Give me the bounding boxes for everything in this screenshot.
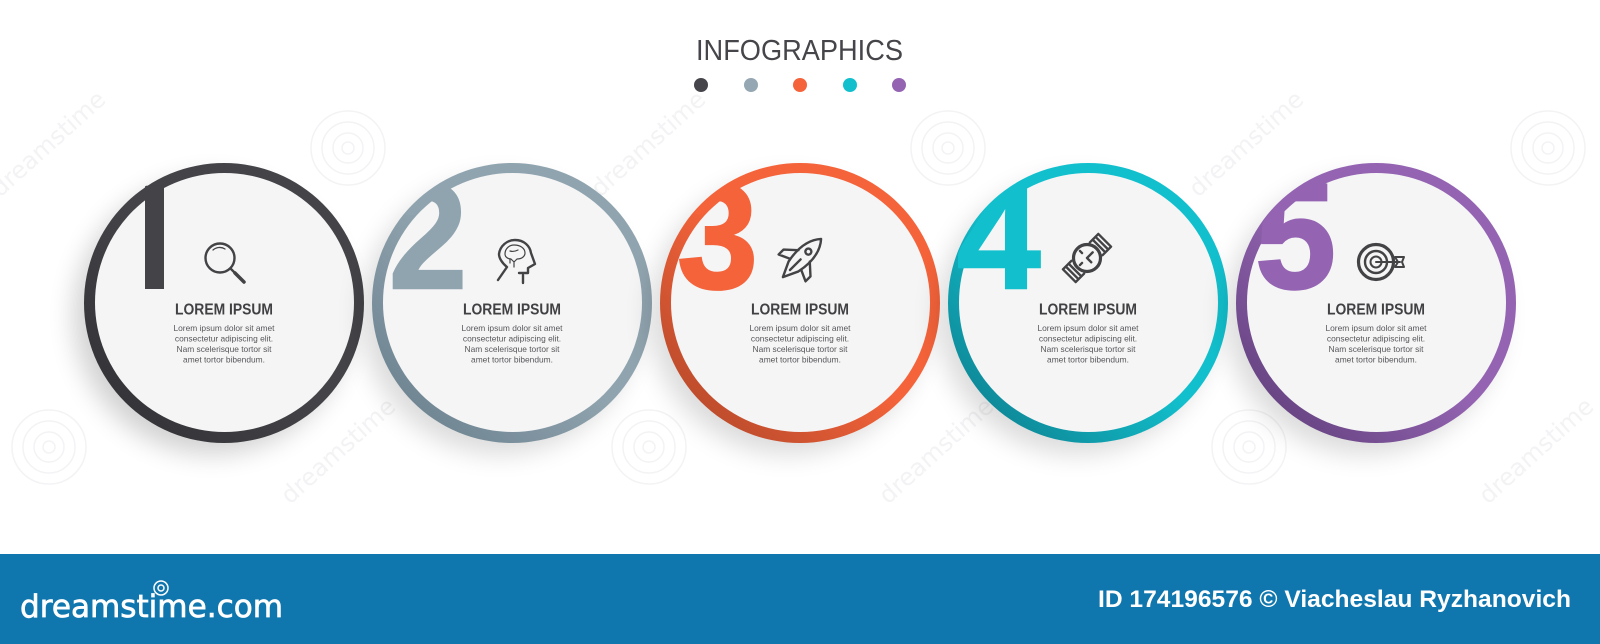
description [461,323,563,364]
description: Lorem ipsum dolor sit amet [1325,323,1427,333]
color legend dots [694,78,906,92]
heading: LOREM IPSUM [1039,302,1137,318]
number 4: 4 [957,152,1040,320]
number 5: 5 [1255,152,1336,320]
icon: magnifier [206,244,244,282]
description: consectetur adipiscing elit. [751,334,849,344]
heading: LOREM IPSUM [463,302,561,318]
description: Lorem ipsum dolor sit amet [1037,323,1139,333]
description: consectetur adipiscing elit. [1039,334,1137,344]
watermark pattern: dreamstime [585,85,711,202]
description: Nam scelerisque tortor sit [465,344,560,354]
description: amet tortor bibendum. [471,354,553,364]
description: amet tortor bibendum. [183,354,265,364]
icon: wristwatch [1060,231,1114,285]
watermark pattern: dreamstime [275,392,401,509]
brand wordmark: dreamstime.com [20,589,283,625]
number 1: 1 [110,153,193,321]
description [173,323,275,364]
icon: head with brain [498,240,535,283]
description: Nam scelerisque tortor sit [1041,344,1136,354]
image credit: ID 174196576 © Viacheslau Ryzhanovich [1098,586,1571,613]
panel: step 1 [74,153,364,454]
description [1325,323,1427,364]
number 2: 2 [389,152,467,320]
panel: step 4 [938,152,1228,454]
panel: step 2 [362,152,652,454]
panel: step 3 [650,152,940,454]
description: Nam scelerisque tortor sit [1329,344,1424,354]
description: consectetur adipiscing elit. [1327,334,1425,344]
description: amet tortor bibendum. [1047,354,1129,364]
heading: LOREM IPSUM [175,302,273,318]
number 3: 3 [677,152,758,320]
icon: target with arrow [1358,244,1404,280]
description: Nam scelerisque tortor sit [753,344,848,354]
title: INFOGRAPHICS [696,35,903,67]
description: consectetur adipiscing elit. [463,334,561,344]
description: consectetur adipiscing elit. [175,334,273,344]
watermark pattern: dreamstime [873,392,999,509]
panel: step 5 [1226,152,1516,454]
watermark pattern [0,85,1599,509]
description: amet tortor bibendum. [759,354,841,364]
heading: LOREM IPSUM [751,302,849,318]
icon: rocket [769,225,835,291]
watermark pattern: dreamstime [1183,85,1309,202]
heading: LOREM IPSUM [1327,302,1425,318]
description: Lorem ipsum dolor sit amet [749,323,851,333]
description: Lorem ipsum dolor sit amet [461,323,563,333]
description: Nam scelerisque tortor sit [177,344,272,354]
description: Lorem ipsum dolor sit amet [173,323,275,333]
footer banner [0,554,1600,644]
description [1037,323,1139,364]
watermark pattern: dreamstime [1473,392,1599,509]
description [749,323,851,364]
icon: spiral logo [154,581,168,595]
description: amet tortor bibendum. [1335,354,1417,364]
